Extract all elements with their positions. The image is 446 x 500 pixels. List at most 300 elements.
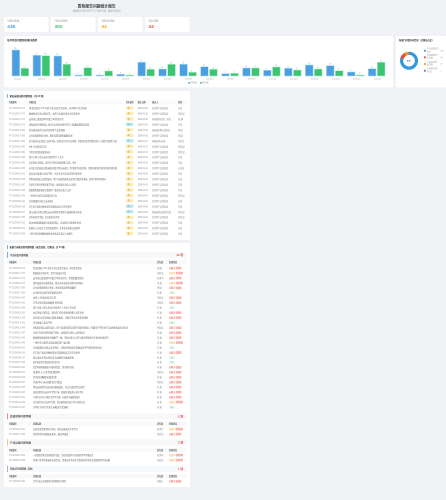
section table: platform R&D: 文件上传进度显示异常 bbox=[33, 296, 56, 300]
table rows: 分页器跳转功能点击无响应 bbox=[29, 199, 54, 203]
table header row: 问题标题 bbox=[29, 100, 37, 104]
table rows: 张伟明产品研发组 bbox=[152, 193, 169, 197]
table rows: 2024-04-07 bbox=[138, 195, 148, 197]
section table: platform R&D: PT-2024013-349 bbox=[9, 328, 26, 330]
section table: platform R&D: 未解决 bbox=[169, 350, 176, 354]
section table: platform R&D: 未解决 bbox=[169, 301, 176, 305]
section table: platform R&D: 支付接口偶发超时导致订单状态异常，需增加重试机制 bbox=[33, 276, 84, 280]
table rows: 开发 bbox=[178, 122, 183, 126]
bars: 12 bbox=[23, 66, 26, 68]
table rows: PT-2024016-362 bbox=[9, 146, 26, 148]
table rows: 2024-04-18 bbox=[138, 119, 148, 121]
donut legend: 平台研发部门 bbox=[427, 47, 439, 51]
panel: monthly bar chart bbox=[4, 36, 393, 87]
bars: 11 bbox=[317, 67, 320, 69]
table rows: 搜索结果排序规则错误，相关内容未按时间倒序排列，需要重新调整算法逻辑 bbox=[29, 122, 89, 126]
section table: platform R&D: 开发 bbox=[157, 355, 163, 359]
section table: platform R&D: 开发 bbox=[157, 390, 163, 394]
donut legend: 2 bbox=[440, 70, 442, 72]
section table: platform R&D: 库存数量与实际不符 bbox=[33, 320, 53, 324]
table rows: 中 bbox=[128, 122, 130, 126]
section table: platform R&D: 未解决 bbox=[169, 310, 176, 314]
section table: platform R&D: 开发 bbox=[157, 375, 163, 379]
bars: 30 bbox=[56, 54, 59, 56]
bars: 10 bbox=[149, 67, 152, 69]
section table: platform R&D: 开发 bbox=[157, 385, 163, 389]
section table: platform R&D: 未解决 bbox=[169, 380, 176, 384]
table rows: 会员等级计算错误，部分用户积分未按规则累计显示，需修 bbox=[29, 161, 76, 165]
table rows: 张伟明产品研发组 bbox=[152, 188, 169, 192]
table rows: 文件上传进度显示异常 bbox=[29, 144, 47, 148]
bars: 2024-04 bbox=[332, 78, 340, 80]
section table: external partners: 未解决 bbox=[169, 479, 176, 483]
section table: platform R&D: 处理状态 bbox=[169, 260, 178, 264]
table rows: 待验证 bbox=[178, 139, 185, 143]
table rows: PT-2024013-351 bbox=[9, 174, 26, 176]
table rows: 支付成功后回调接口偶发未触发导致订单状态未更新，用户重复付款投诉增多，需要补偿机制并排查消息队列堆积问题 bbox=[29, 166, 117, 170]
table rows: PT-2024007-335 bbox=[9, 217, 26, 219]
section table: platform R&D: 富文本编辑器粘贴内容格式错乱，保存偶尔失效 bbox=[33, 365, 74, 369]
bars: 39 bbox=[14, 48, 17, 50]
section table: platform R&D: 已解决 bbox=[169, 405, 175, 409]
bars: 18 bbox=[182, 62, 185, 64]
section table: platform R&D: PT-2024007-335 bbox=[9, 362, 26, 364]
bars: 16 bbox=[329, 64, 332, 66]
bars: 21 bbox=[380, 60, 383, 62]
table rows: 客户端在部分安卓机型上启动时闪退，崩溃日志显示内存访问越界，需要紧急排查并提供热修复补丁以避免大面积用户流失 bbox=[29, 139, 117, 143]
section table: platform R&D: 后台权限配置保存失败，刷新页面后配置被重置 bbox=[33, 286, 76, 290]
bars: 11 bbox=[371, 67, 374, 69]
section table: platform R&D: PT-2024017-366 bbox=[9, 288, 26, 290]
section table: platform R&D: 开发 bbox=[157, 310, 163, 314]
section table: platform R&D: 开发 bbox=[157, 291, 163, 295]
section table: product operations: PT-2024014-352 bbox=[9, 455, 26, 457]
title: 质检报告问题统计报告 bbox=[78, 4, 116, 8]
section table: platform R&D: PT-2024017-377 bbox=[9, 273, 26, 275]
table rows: 高 bbox=[128, 111, 130, 115]
stat card: urgent: 紧急问题数 bbox=[148, 18, 159, 22]
section table: product operations: 一键领取优惠活动规则展示错误，活动页面说明与实际配置不符导致投诉 bbox=[33, 453, 94, 457]
section table: platform R&D: PT-2024008-337 bbox=[9, 357, 26, 359]
section table: product operations: 处理中 bbox=[157, 453, 164, 457]
table rows: 商品库存数量与实际不符，同步任务存在延迟需排查修复 bbox=[29, 172, 82, 176]
section table: QA: 待验证 bbox=[157, 432, 164, 436]
bars: 8 bbox=[108, 69, 110, 71]
table rows: 高 bbox=[128, 150, 130, 154]
table rows: 高 bbox=[128, 226, 130, 230]
table rows: 张伟明产品研发组 bbox=[152, 155, 169, 159]
table rows: PT-2024009-341 bbox=[9, 201, 26, 203]
table rows: 开发 bbox=[178, 199, 183, 203]
section table: platform R&D: 接口鉴权令牌过期后未自动刷新导致被登出 bbox=[33, 355, 74, 359]
section header: product operations bbox=[7, 439, 187, 446]
table rows: 张伟明产品研发组 bbox=[152, 215, 169, 219]
table rows: 数据报表导出功能异常，文件内容缺失部分字段需修复 bbox=[29, 112, 80, 116]
section table: platform R&D: 后台操作日志记录不完整，部分敏感操作缺少审计追踪信息 bbox=[33, 400, 85, 404]
table rows: 高 bbox=[128, 117, 130, 121]
table rows: 表单校验提示错误，提交按钮状态异常 bbox=[29, 215, 60, 219]
table rows: 开发 bbox=[178, 106, 183, 110]
section table: QA: 处理中 bbox=[157, 427, 164, 431]
table rows: 张伟明产品研发组 bbox=[152, 122, 169, 126]
section table: product operations: 处理中 bbox=[169, 453, 175, 457]
section table: platform R&D: 数据报表导出异常，文件内容缺失字段 bbox=[33, 271, 66, 275]
stat card: resolved: 已解决问题数 bbox=[54, 18, 68, 22]
table rows: 已分配 bbox=[178, 166, 185, 170]
section table: QA: 自动化测试用例执行失败，报告结果未同步至平台 bbox=[33, 427, 78, 431]
bars: 4 bbox=[234, 71, 236, 73]
table heading bbox=[7, 94, 45, 98]
table rows: 优惠券核销接口返回错误码，用户在结算页面无法使用已领取的优惠券，影响下单转化率提升 bbox=[29, 177, 106, 181]
table rows: 开发 bbox=[178, 221, 183, 225]
bars: 2023-03 bbox=[59, 78, 67, 80]
section table: external partners: 问题标题 bbox=[33, 474, 42, 478]
bars: 4 bbox=[225, 72, 227, 74]
section header: product operations: 2 项 bbox=[178, 440, 183, 444]
table rows: 一键分享功能无法调起微信客户端 bbox=[29, 193, 57, 197]
section table: platform R&D: PT-2024011-345 bbox=[9, 338, 26, 340]
section table: platform R&D: PT-2024017-364 bbox=[9, 293, 26, 295]
section table: platform R&D: 定时任务执行失败后未触发告警通知 bbox=[33, 405, 69, 409]
table rows: PT-2024011-345 bbox=[9, 190, 26, 192]
section table: product operations: 问题标题 bbox=[33, 448, 42, 452]
section table: platform R&D: 问题编号 bbox=[9, 260, 17, 264]
section header: product operations: 产品运营问题明细 bbox=[10, 440, 32, 444]
section table: platform R&D: 小程序分享卡片图片显示不完整，标题文字被截断展示 bbox=[33, 395, 80, 399]
table rows: PT-2024023-373 bbox=[9, 108, 26, 110]
table rows: 2024-04-18 bbox=[138, 130, 148, 132]
section table: platform R&D: 未解决 bbox=[169, 315, 176, 319]
section table: platform R&D: 待验证 bbox=[157, 296, 164, 300]
table rows: 处理 bbox=[178, 117, 184, 121]
table rows: 后台权限配置保存失败，刷新页面后配置被重置丢失 bbox=[29, 133, 73, 137]
donut legend: 24 bbox=[440, 57, 444, 59]
table rows: 开发 bbox=[178, 172, 183, 176]
table rows: 2024-04-07 bbox=[138, 201, 148, 203]
table rows: 基础架构运维组刘凯 bbox=[152, 210, 172, 214]
section table: external partners: 待确认 bbox=[157, 479, 164, 483]
table rows: 开发 bbox=[178, 188, 183, 192]
section table: platform R&D: 已解决 bbox=[169, 355, 175, 359]
stat card: resolved bbox=[51, 17, 96, 32]
table rows: PT-2024013-349 bbox=[9, 179, 26, 181]
donut legend: 合计数 bbox=[427, 56, 433, 60]
section header: platform R&D: 29 项 bbox=[176, 253, 183, 257]
table rows: 张伟明产品研发组 bbox=[152, 182, 169, 186]
table rows: 张伟明产品研发组 bbox=[152, 106, 169, 110]
table rows: 张伟明产品研发组 bbox=[152, 177, 169, 181]
section header: external partners: 外部合作问题明细（其他） bbox=[10, 467, 34, 471]
table rows: 高 bbox=[128, 215, 130, 219]
section table: platform R&D: 待验证 bbox=[157, 271, 164, 275]
donut legend bbox=[424, 47, 445, 73]
bars: 12 bbox=[245, 66, 248, 68]
section table: platform R&D: 处理中 bbox=[169, 400, 175, 404]
section table: platform R&D: PT-2024021-371 bbox=[9, 278, 26, 280]
table rows: PT-2024015-358 bbox=[9, 157, 26, 159]
section table: platform R&D: 开发 bbox=[157, 306, 163, 310]
donut legend: 合计数 bbox=[427, 63, 433, 67]
bars: 12 bbox=[287, 66, 290, 68]
table rows: 中 bbox=[128, 139, 130, 143]
section table: platform R&D: 开发 bbox=[157, 281, 163, 285]
chart legend: 新增问题 bbox=[190, 81, 197, 85]
table rows: 张伟明产品研发组 bbox=[152, 221, 169, 225]
bars: 2023-02 bbox=[38, 78, 46, 80]
section table: platform R&D: 未解决 bbox=[169, 395, 176, 399]
table rows: PT-2024015-355 bbox=[9, 163, 26, 165]
stat card: urgent bbox=[145, 17, 190, 32]
bars: 2023-07 bbox=[143, 78, 151, 80]
section table: platform R&D: 未解决 bbox=[169, 296, 176, 300]
section table: platform R&D: 首页轮播图加载失败 bbox=[33, 375, 57, 379]
table header row bbox=[7, 100, 187, 105]
section table: platform R&D: 开发 bbox=[157, 395, 163, 399]
table rows: 2024-04-03 bbox=[138, 223, 148, 225]
section table: platform R&D: PT-2024015-355 bbox=[9, 312, 26, 314]
section table: platform R&D: 导航栏在低分辨率屏幕下错位，遮挡部分功能入口按钮显示 bbox=[33, 330, 85, 334]
bars: 14 bbox=[203, 65, 206, 67]
table rows: 小程序首页轮播图加载失败时未显示默认占位图片 bbox=[29, 232, 73, 236]
table rows: 批量导入功能对大文件处理超时，任务状态停留在处理中 bbox=[29, 226, 80, 230]
table rows: 开发 bbox=[178, 232, 183, 236]
table rows: PT-2024004-329 bbox=[9, 234, 26, 236]
donut legend: 产品运营部门 bbox=[427, 60, 438, 64]
bars: 18 bbox=[65, 62, 68, 64]
stat card: open: 34 bbox=[102, 24, 107, 30]
table rows: 2024-04-13 bbox=[138, 174, 148, 176]
bars: 2 bbox=[78, 73, 80, 75]
table rows: 2024-04-06 bbox=[138, 206, 148, 208]
bars: 2 bbox=[99, 73, 101, 75]
section table: platform R&D: 待验证 bbox=[157, 370, 164, 374]
section header: QA: 质量保障问题明细 bbox=[10, 414, 32, 418]
donut legend: 合计 bbox=[427, 49, 431, 53]
bars: 2023-10 bbox=[206, 78, 214, 80]
section table: platform R&D: 处理中 bbox=[157, 276, 164, 280]
table rows: 高 bbox=[128, 193, 130, 197]
table rows: 接口鉴权令牌过期后未自动刷新导致用户被强制登出系统 bbox=[29, 210, 82, 214]
section table: platform R&D: 用户头像上传后未同步更新到个人主页与评论区 bbox=[33, 306, 76, 310]
section table: product operations: 新用户首单优惠未能自动生效，需要运营手动补发优惠券并排查活动配置的时间范围 bbox=[33, 458, 110, 462]
section table: QA: 优先级 bbox=[157, 422, 164, 426]
section table: platform R&D: 开发 bbox=[157, 400, 163, 404]
section table: platform R&D: 数据看板图表刷新后数据不一致，需核对统计口径与缓存策略并同步更新文档说明 bbox=[33, 336, 109, 340]
table rows: 富文本编辑器粘贴内容格式错乱，自动保存功能偶尔失效 bbox=[29, 221, 81, 225]
table rows: 高 bbox=[128, 188, 130, 192]
section table: platform R&D: 处理中 bbox=[169, 340, 175, 344]
bars: 2024-01 bbox=[269, 78, 277, 80]
section table: platform R&D: 开发 bbox=[157, 315, 163, 319]
table header row: 指派人 bbox=[152, 100, 159, 104]
section header: platform R&D: 平台研发问题明细 bbox=[10, 253, 29, 257]
section table: QA bbox=[7, 422, 187, 436]
stat card: resolved: 355 bbox=[54, 24, 63, 30]
table rows: PT-2024021-371 bbox=[9, 119, 26, 121]
table rows: 高 bbox=[128, 199, 130, 203]
section table: platform R&D: 开发 bbox=[157, 340, 163, 344]
section table: platform R&D: PT-2024013-351 bbox=[9, 322, 26, 324]
table rows: 张伟明产品研发组 bbox=[152, 199, 169, 203]
section table: platform R&D: 订单详情页面加载缓慢卡顿明显 bbox=[33, 301, 63, 305]
table header row: 优先级别 bbox=[126, 100, 134, 104]
table rows: 2024-04-15 bbox=[138, 163, 148, 165]
table header row: 状态 bbox=[178, 100, 183, 104]
bars: 8 bbox=[338, 69, 340, 71]
section table: platform R&D: 待验证 bbox=[157, 326, 164, 330]
table rows: 高 bbox=[128, 106, 130, 110]
section table: platform R&D: PT-2024008-339 bbox=[9, 352, 26, 354]
table rows: 2024-04-18 bbox=[138, 124, 148, 126]
bars: 2 bbox=[359, 73, 361, 75]
table rows: 2024-04-05 bbox=[138, 212, 148, 214]
section table: product operations: PT-2024017-368 bbox=[9, 460, 26, 462]
section header: platform R&D bbox=[7, 252, 187, 258]
section table: platform R&D: 未解决 bbox=[169, 370, 176, 374]
section table: platform R&D: 处理中 bbox=[169, 271, 175, 275]
bars: 30 bbox=[44, 54, 47, 56]
bars: 10 bbox=[212, 67, 215, 69]
section table: external partners bbox=[7, 474, 187, 483]
section table: product operations: 优先级 bbox=[157, 448, 164, 452]
table rows: 高 bbox=[128, 166, 130, 170]
section table: platform R&D: 未解决 bbox=[169, 390, 176, 394]
section table: platform R&D: 退款流程状态未同步至用户端，客服查询结果与实际不符 bbox=[33, 390, 84, 394]
table rows: 待验证 bbox=[178, 144, 185, 148]
table rows: 待验证 bbox=[178, 215, 185, 219]
bars: 21 bbox=[140, 60, 143, 62]
section table: platform R&D: 问题标题 bbox=[33, 260, 42, 264]
table rows: 张伟明产品研发组 bbox=[152, 204, 169, 208]
table rows: 2024-04-02 bbox=[138, 228, 148, 230]
table rows: PT-2024016-360 bbox=[9, 152, 26, 154]
bars: 6 bbox=[350, 70, 352, 72]
table rows: 用户头像上传后未同步更新到个人主页 bbox=[29, 155, 64, 159]
table rows: 2024-04-19 bbox=[138, 108, 148, 110]
bars: 2023-04 bbox=[80, 78, 88, 80]
donut legend: 396 bbox=[440, 50, 445, 52]
table rows: 高 bbox=[128, 177, 130, 181]
section table: product operations bbox=[7, 448, 187, 462]
section table: external partners: 合作方接口文档版本过期需要同步更新 bbox=[33, 479, 66, 483]
table rows: 2024-04-17 bbox=[138, 141, 148, 143]
section table: platform R&D: 优先级 bbox=[157, 260, 164, 264]
section table: platform R&D: 未解决 bbox=[169, 276, 176, 280]
table rows: 开发 bbox=[178, 161, 183, 165]
table rows: iOS 客户端夜间模式部分页面颜色显示异常待修复 bbox=[29, 204, 72, 208]
section table: platform R&D: PT-2023123-317 bbox=[9, 407, 26, 409]
table rows: 张伟明产品研发组 bbox=[152, 112, 169, 116]
table rows: PT-2024008-339 bbox=[9, 206, 26, 208]
section table: product operations: 处理中 bbox=[169, 458, 175, 462]
stat card: total issues: 435 bbox=[7, 24, 16, 30]
section table: platform R&D: PT-2024016-362 bbox=[9, 298, 26, 300]
table rows: 开发 bbox=[178, 226, 183, 230]
section table: platform R&D: 已解决 bbox=[169, 306, 175, 310]
section table: platform R&D: PT-2024016-360 bbox=[9, 303, 26, 305]
bars: 6 bbox=[191, 70, 193, 72]
section table: platform R&D: 未解决 bbox=[169, 286, 176, 290]
section table: platform R&D: 未解决 bbox=[169, 326, 176, 330]
bars: 9 bbox=[296, 68, 298, 70]
table rows: PT-2024018-374 bbox=[9, 124, 26, 126]
table rows: 2024-04-16 bbox=[138, 157, 148, 159]
table rows: 2024-04-10 bbox=[138, 190, 148, 192]
stat card: total issues bbox=[4, 17, 48, 32]
section table: platform R&D bbox=[7, 260, 187, 409]
section table: platform R&D: PT-2024004-329 bbox=[9, 377, 26, 379]
table rows: 中 bbox=[128, 204, 130, 208]
table rows: 2024-04-18 bbox=[138, 114, 148, 116]
bars: 9 bbox=[266, 68, 268, 70]
section table: platform R&D: 地址选择组件在部分省市数据缺失，无法完成收货信息填写 bbox=[33, 385, 85, 389]
table heading: 紧急未解决的问题列表（共 24 项） bbox=[10, 94, 45, 98]
table rows: 高 bbox=[128, 155, 130, 159]
bars: 2023-12 bbox=[248, 78, 256, 80]
table rows: 基础架构运维组（刘凯） bbox=[152, 117, 172, 121]
section table: platform R&D: PT-2024010-343 bbox=[9, 342, 26, 344]
section table: platform R&D: 未解决 bbox=[169, 336, 176, 340]
section table: product operations: 待验证 bbox=[157, 458, 164, 462]
table rows: PT-2024017-366 bbox=[9, 130, 26, 132]
section table: QA: 问题标题 bbox=[33, 422, 42, 426]
section table: QA: 未解决 bbox=[169, 432, 176, 436]
chart legend: 解决问题 bbox=[202, 81, 208, 85]
panel: issues by department bbox=[4, 243, 190, 487]
table rows: 待验证 bbox=[178, 150, 185, 154]
section table: platform R&D: PT-2024009-341 bbox=[9, 347, 26, 349]
donut heading: 各部门问题分布情况（已解决占比） bbox=[399, 38, 434, 42]
bars: 12 bbox=[254, 66, 257, 68]
table rows: 2024-04-11 bbox=[138, 184, 148, 186]
table rows: PT-2024012-347 bbox=[9, 184, 26, 186]
section table: platform R&D: PT-2024012-347 bbox=[9, 332, 26, 334]
bars: 2024-02 bbox=[290, 78, 298, 80]
panel heading bbox=[7, 245, 66, 249]
table rows: 开发 bbox=[178, 204, 183, 208]
table rows: 数据看板图表刷新后数据不一致需核对统计口径 bbox=[29, 188, 71, 192]
table rows: 2024-04-12 bbox=[138, 179, 148, 181]
section table: platform R&D: PT-2024023-373 bbox=[9, 268, 26, 270]
table rows: PT-2024017-377 bbox=[9, 114, 26, 116]
bars: 14 bbox=[275, 65, 278, 67]
section table: platform R&D: 待验证 bbox=[157, 301, 164, 305]
section table: platform R&D: PT-2024018-374 bbox=[9, 283, 26, 285]
section table: platform R&D: PT-2024006-333 bbox=[9, 367, 26, 369]
table rows: 待验证 bbox=[178, 193, 185, 197]
donut ring: 435 bbox=[407, 60, 411, 62]
table rows: 测试 bbox=[178, 133, 184, 137]
table rows: 高 bbox=[128, 160, 130, 164]
section table: platform R&D: 支付成功后回调接口偶发未触发，导致订单状态未及时更新 bbox=[33, 315, 89, 319]
section table: QA: 处理中 bbox=[169, 427, 175, 431]
table rows: PT-2024014-353 bbox=[9, 168, 26, 170]
section table: platform R&D: 开发 bbox=[157, 350, 163, 354]
table rows: 高 bbox=[128, 171, 130, 175]
bars: 2023-06 bbox=[122, 78, 130, 80]
table rows: 基础架构运维组 bbox=[152, 128, 170, 132]
bars: 18 bbox=[170, 62, 173, 64]
table rows: 中 bbox=[128, 210, 130, 214]
table rows: 高 bbox=[128, 144, 130, 148]
table rows: 2024-04-17 bbox=[138, 152, 148, 154]
section table: platform R&D: 待验证 bbox=[157, 380, 164, 384]
table rows: 开发 bbox=[178, 177, 183, 181]
bars: 2023-05 bbox=[101, 78, 109, 80]
section table: platform R&D: 未解决 bbox=[169, 385, 176, 389]
table rows: 高 bbox=[128, 133, 130, 137]
section header: external partners: 1 项 bbox=[178, 467, 183, 471]
